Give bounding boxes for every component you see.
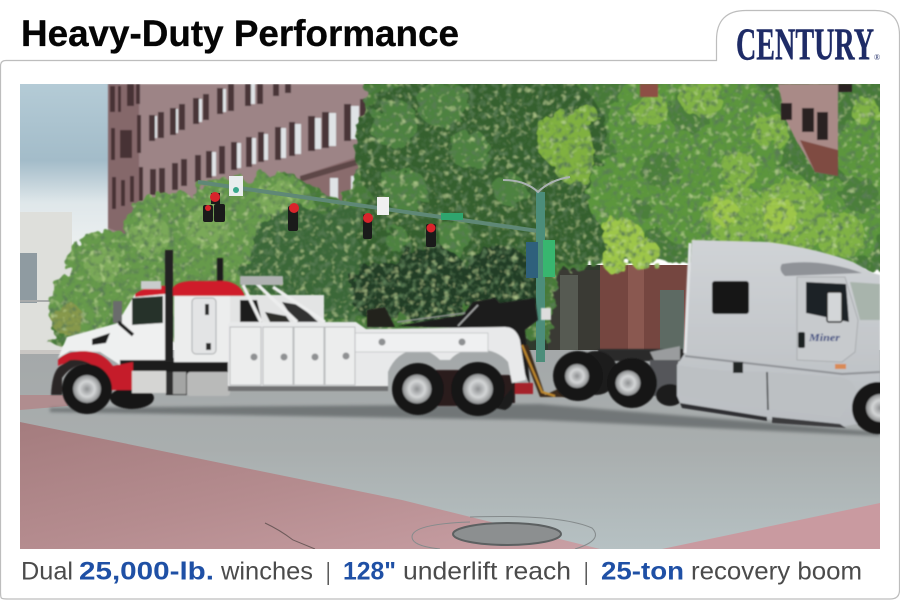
cab [113,281,165,360]
left tree canopy [48,173,317,337]
side step and fuel tank [132,371,166,393]
caption: underlift reach: 128" [343,558,396,586]
manhole cover [412,516,596,549]
far road shoulder [20,350,62,354]
step notch and amber light [733,362,743,373]
front wheel [852,382,900,434]
traffic signals [203,193,436,247]
pink sidewalk, lower right [662,503,880,549]
trees [48,60,900,345]
tow truck [51,250,578,416]
white building, far left [20,212,72,352]
caption: underlift reach [343,558,571,586]
caption: specifications [21,558,862,586]
caption: recovery boom [601,558,862,586]
brick office building [107,84,370,235]
pink sidewalk, lower left [20,422,600,549]
door lettering: Miner [808,333,840,344]
door handle [798,332,805,348]
distant brick building, upper right [640,84,852,176]
rear wheels [392,362,513,416]
title: Heavy-Duty Performance [21,13,459,54]
caption: dual winches: winches [220,558,313,586]
front wheel [62,364,112,414]
photo: tow truck towing a semi tractor at an intersection [20,60,900,549]
cab and sleeper shell [677,240,880,427]
signal pole [536,192,545,362]
hood [58,323,120,365]
lower side skirts [677,365,856,418]
caption: dual winches: Dual [21,558,73,586]
boom and rear wrecker body [367,298,551,385]
chassis frame [598,346,684,406]
sleeper window [712,281,749,314]
underlift arm [514,344,566,398]
second front axle wheel [110,387,154,409]
chassis shadow [120,358,228,374]
towed semi tractor [553,240,900,434]
sky [20,84,120,254]
divider [586,562,587,585]
tree backdrop fill [50,60,900,345]
red fender [58,351,133,390]
caption: recovery boom: 25-ton [601,558,684,586]
pole banners [526,242,538,278]
building windows [149,84,375,206]
caption: dual winches: 25,000-lb. [79,558,214,586]
raised rear wheels [553,351,657,408]
windshield [850,282,880,320]
street signs [229,176,243,196]
side mirror [113,301,122,323]
logo: Century: ® [874,53,880,62]
traffic signal mast arm [198,176,570,362]
mirror [827,292,842,322]
pavement cracks [265,523,315,549]
storefront behind the trucks [488,265,688,350]
caption: recovery boom: recovery boom [691,558,862,586]
road [20,350,880,549]
right bright tree [584,84,880,264]
door [797,277,858,362]
road shadow band [50,404,880,436]
caption: dual winches [21,558,313,586]
caption: underlift reach: underlift reach [403,558,571,586]
central dark tree [352,84,607,268]
sleeper and roof [173,281,245,362]
exhaust stacks [217,258,223,284]
ladder rack and back of sleeper [228,276,325,325]
door window [806,282,849,322]
tool box body [228,322,526,391]
divider [328,562,329,585]
